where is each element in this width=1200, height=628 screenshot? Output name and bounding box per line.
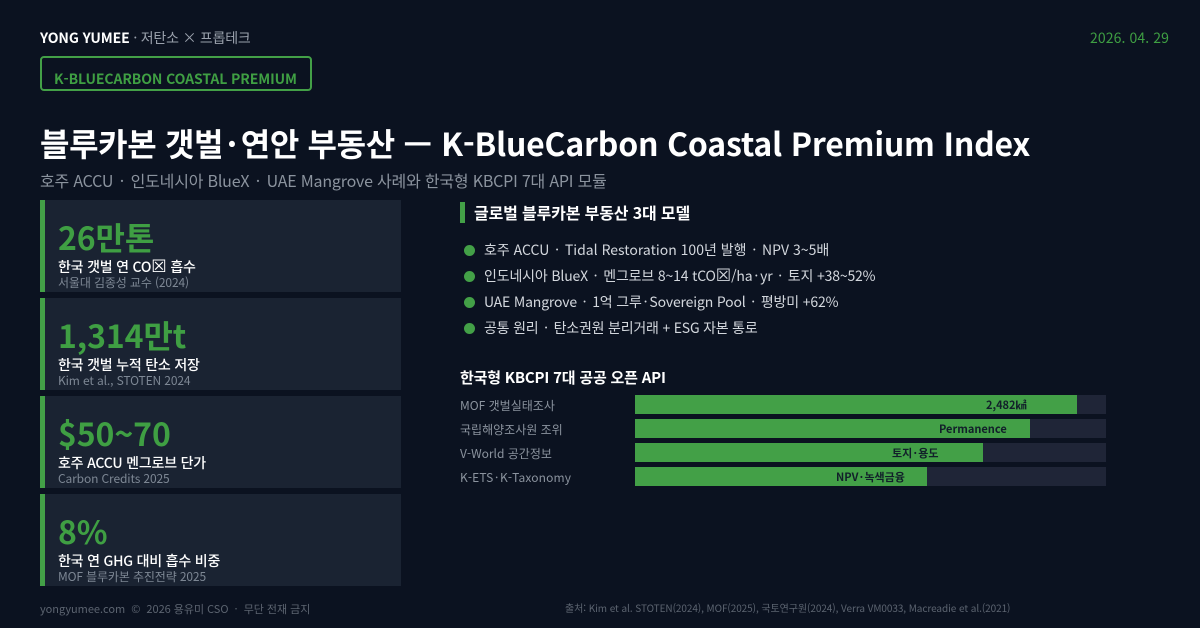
stat source: 서울대 김종성 교수 (2024) <box>58 274 189 291</box>
bullet dot <box>464 245 475 256</box>
subtitle: · <box>256 168 260 192</box>
bar value: NPV 녹색금융 <box>836 469 905 485</box>
bar fill <box>635 395 1077 414</box>
bar label: · <box>495 469 498 486</box>
brand line: YONG YUMEE · 저탄소 × 프롭테크 <box>40 28 251 48</box>
bar fill <box>635 443 983 462</box>
section accent bar <box>460 202 465 223</box>
title: · <box>227 120 237 166</box>
bullet dot <box>464 297 475 308</box>
bullet text: 인도네시아 BlueX 멘그로브 8~14 tCO☒/ha yr 토지 +38~52% <box>484 266 875 286</box>
subtitle: 호주 ACCU 인도네시아 BlueX UAE Mangrove 사례와 한국형 KBCPI 7대 API 모듈 <box>40 168 607 192</box>
bar value: Permanence <box>939 421 1007 437</box>
bar: tide <box>635 419 1106 438</box>
stat value: $50~70 <box>58 410 171 456</box>
footer sources: 출처: Kim et al. STOTEN(2024), MOF(2025), 국토연구원(2024), Verra VM0033, Macreadie et al.(2021) <box>565 600 1010 615</box>
bullet text: · <box>583 292 587 312</box>
bullet dot <box>464 323 475 334</box>
bar: K-ETS <box>635 467 1106 486</box>
bar label: MOF 갯벌실태조사 <box>460 397 555 414</box>
bullet text: 공통 원리 탄소권원 분리거래 + ESG 자본 통로 <box>484 318 758 338</box>
bar: MOF <box>635 395 1106 414</box>
bar label: V-World 공간정보 <box>460 445 552 462</box>
title: 블루카본 갯벌 연안 부동산 — K-BlueCarbon Coastal Premium Index <box>40 120 1030 166</box>
bar value: · <box>860 469 863 485</box>
bullet dot <box>464 271 475 282</box>
bullet text: · <box>754 266 758 286</box>
stat source: Carbon Credits 2025 <box>58 470 170 487</box>
bar fill <box>635 419 1030 438</box>
bar value: 2,482㎢ <box>986 397 1027 413</box>
stat label: 한국 연 GHG 대비 흡수 비중 <box>58 551 220 571</box>
bar label: 국립해양조사원 조위 <box>460 421 563 438</box>
bullet text: · <box>778 266 782 286</box>
bar: V-World <box>635 443 1106 462</box>
badge text: K-BLUECARBON COASTAL PREMIUM <box>54 69 297 89</box>
stat value: 26만톤 <box>58 214 154 260</box>
panel: stat $50~70 <box>40 396 401 488</box>
section heading: models: 글로벌 블루카본 부동산 3대 모델 <box>474 200 690 224</box>
stat value: 1,314만t <box>58 312 186 358</box>
bullet text: 호주 ACCU Tidal Restoration 100년 발행 NPV 3~5배 <box>484 240 829 260</box>
bullet text: · <box>752 240 756 260</box>
stat label: 한국 갯벌 누적 탄소 저장 <box>58 355 200 375</box>
stat value: 8% <box>58 508 108 554</box>
date: 2026. 04. 29 <box>1090 28 1169 48</box>
panel: stat 8% <box>40 494 401 586</box>
footer left: yongyumee.com © 2026 용유미 CSO · 무단 전재 금지 <box>40 601 310 617</box>
bullet text: · <box>594 266 598 286</box>
bullet text: · <box>751 292 755 312</box>
bar value: 토지 용도 <box>892 445 939 461</box>
bar value: · <box>913 445 917 461</box>
stat label: 한국 갯벌 연 CO☒ 흡수 <box>58 257 196 277</box>
panel: stat 26만톤 <box>40 200 401 292</box>
bullet text: · <box>644 292 648 312</box>
subtitle: · <box>120 168 124 192</box>
stat label: 호주 ACCU 멘그로브 단가 <box>58 453 206 473</box>
bar fill <box>635 467 927 486</box>
stat source: MOF 블루카본 추진전략 2025 <box>58 568 206 585</box>
badge <box>40 56 312 91</box>
bullet text: · <box>555 240 559 260</box>
bullet text: UAE Mangrove 1억 그루 Sovereign Pool 평방미 +62% <box>484 292 838 312</box>
bar label: K-ETS K-Taxonomy <box>460 469 571 486</box>
stat source: Kim et al., STOTEN 2024 <box>58 372 190 389</box>
panel: stat 1,314만t <box>40 298 401 390</box>
bullet text: · <box>544 318 548 338</box>
section heading: API: 한국형 KBCPI 7대 공공 오픈 API <box>460 367 666 388</box>
